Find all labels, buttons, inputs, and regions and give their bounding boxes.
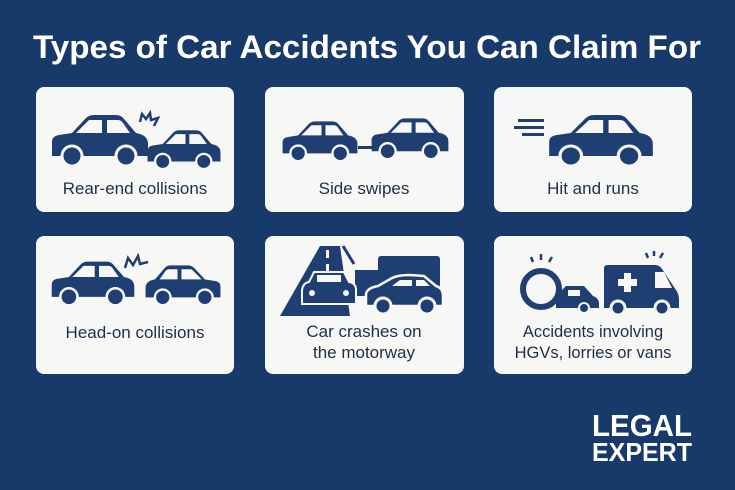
label: Side swipes bbox=[319, 179, 409, 198]
label bbox=[515, 323, 671, 362]
panel: head-on collisions bbox=[36, 236, 234, 374]
icon: rear-end cars bbox=[52, 113, 220, 169]
icon: speeding car bbox=[514, 115, 653, 166]
logo: Legal Expert: EXPERT bbox=[592, 437, 692, 467]
panel: rear-end collisions bbox=[36, 87, 234, 212]
title: Types of Car Accidents You Can Claim For bbox=[33, 29, 701, 65]
icon: motorway pile-up bbox=[280, 246, 443, 316]
label: the motorway bbox=[313, 343, 416, 362]
label: Accidents involving bbox=[523, 323, 663, 341]
panel: hit and runs bbox=[494, 87, 692, 212]
icon: head-on cars bbox=[52, 256, 220, 305]
label bbox=[306, 322, 422, 362]
icon: two cars side swipe bbox=[283, 118, 448, 161]
label: Head-on collisions bbox=[66, 323, 204, 342]
label: Car crashes on bbox=[306, 322, 422, 341]
label: Hit and runs bbox=[547, 179, 639, 198]
logo: Legal Expert bbox=[592, 408, 692, 467]
panel: motorway crashes bbox=[265, 236, 464, 374]
panel: HGV accidents bbox=[494, 236, 692, 374]
panel: side swipes bbox=[265, 87, 464, 212]
label: Rear-end collisions bbox=[63, 179, 207, 198]
icon: lorry and ambulance bbox=[523, 251, 679, 315]
label: HGVs, lorries or vans bbox=[515, 344, 671, 362]
logo: Legal Expert: LEGAL bbox=[592, 408, 692, 443]
